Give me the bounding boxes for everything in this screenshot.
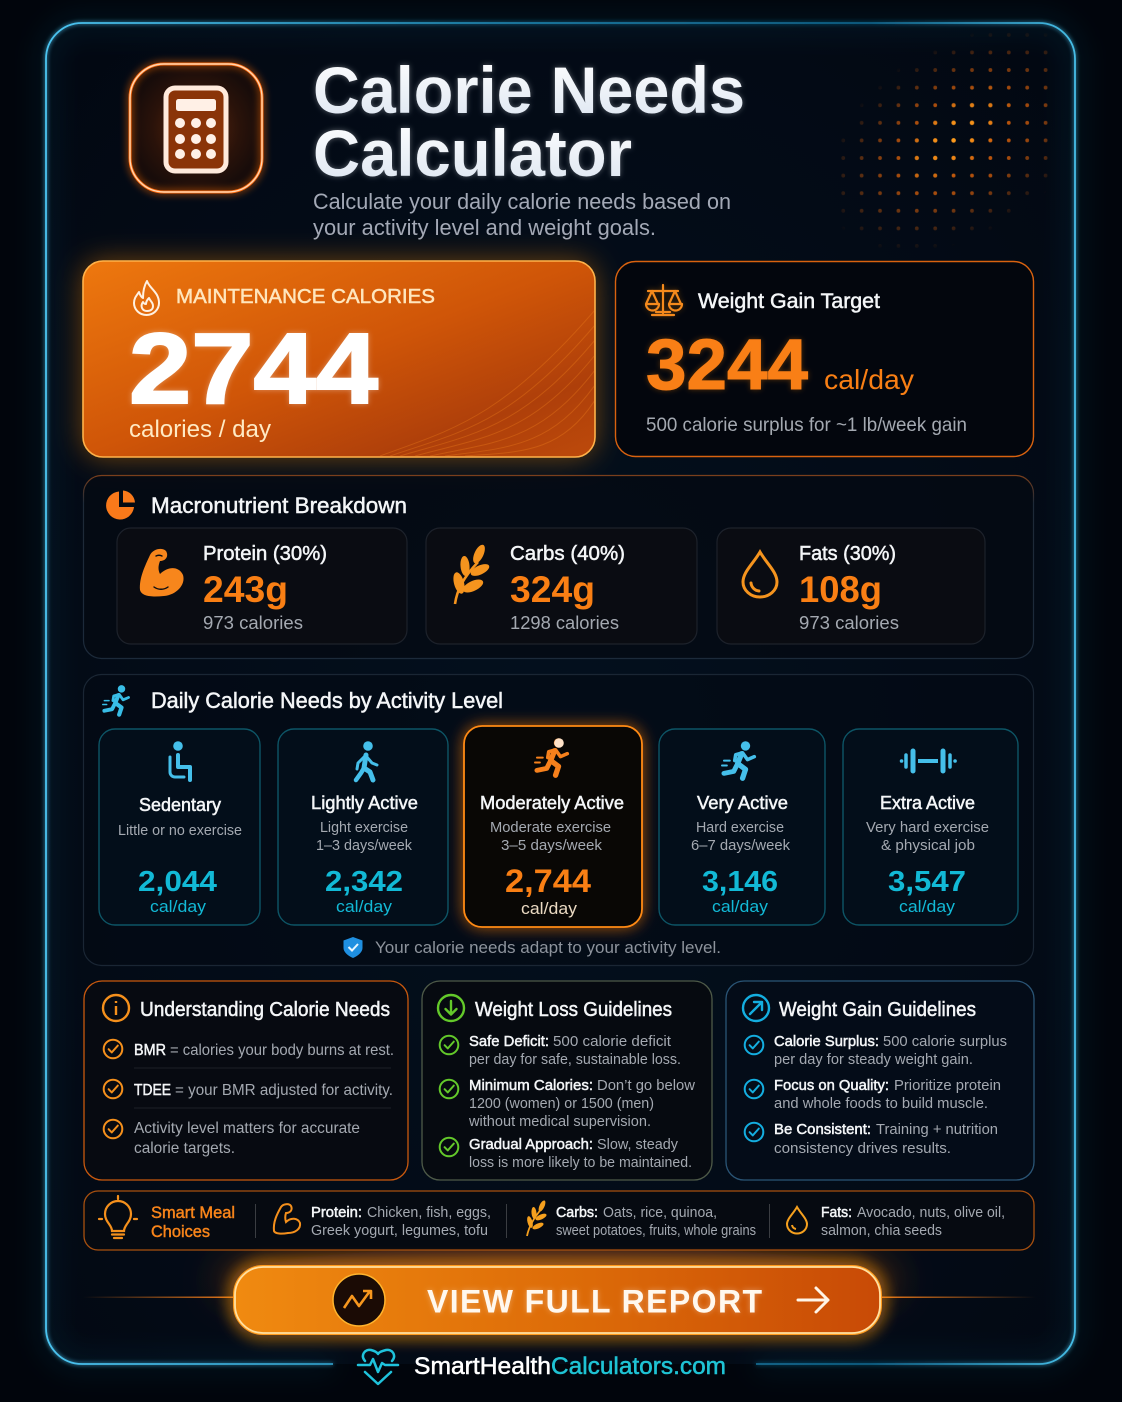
heading: macronutrient breakdown: Macronutrient Breakdown xyxy=(151,493,407,518)
card: fats xyxy=(717,528,985,644)
item: gradual approach: loss is more likely to be maintained. xyxy=(469,1154,692,1171)
icon: walking person xyxy=(356,741,377,780)
panel: macronutrient breakdown xyxy=(84,476,1034,658)
card: lightly active xyxy=(278,729,448,925)
text: protein foods: Protein: xyxy=(311,1205,362,1221)
heading: activity level: Daily Calorie Needs by Activity Level xyxy=(151,688,503,713)
item: minimum calories: without medical supervision. xyxy=(468,1113,651,1130)
icon: shield check xyxy=(344,937,362,958)
text: protein foods: Greek yogurt, legumes, tofu xyxy=(311,1223,488,1239)
description: very active: 6–7 days/week xyxy=(691,838,791,854)
brand name xyxy=(414,1353,726,1380)
subtitle xyxy=(313,189,731,240)
value: lightly active: 2,342 xyxy=(325,866,403,898)
item: safe deficit xyxy=(440,1033,681,1068)
label: smart meal choices xyxy=(151,1204,235,1241)
item: be consistent: Be Consistent: xyxy=(774,1121,871,1138)
item: activity level xyxy=(104,1120,360,1157)
note: activity adaptation: Your calorie needs adapt to your activity level. xyxy=(375,939,721,957)
icon: arrow down xyxy=(438,995,464,1021)
icon: wheat small xyxy=(526,1200,547,1236)
item: TDEE: = your BMR adjusted for activity. xyxy=(175,1082,393,1099)
description: extra active: & physical job xyxy=(881,838,975,854)
label: smart meal choices: Choices xyxy=(151,1223,210,1241)
card: sedentary xyxy=(99,729,260,925)
label: carbs share: Carbs (40%) xyxy=(510,543,625,565)
title: Calculator xyxy=(313,116,632,190)
value: moderately active: 2,744 xyxy=(505,863,591,899)
button glow xyxy=(218,1246,898,1314)
item: minimum calories: Minimum Calories: xyxy=(469,1077,593,1094)
description: extra active: Very hard exercise xyxy=(866,820,989,836)
panel: maintenance calories xyxy=(83,261,595,457)
note: fats calories: 973 calories xyxy=(799,613,899,633)
text: protein foods: Chicken, fish, eggs, xyxy=(367,1205,491,1221)
item: safe deficit: per day for safe, sustainable loss. xyxy=(469,1051,681,1068)
description: very active xyxy=(691,820,791,854)
icon: runner heading xyxy=(103,685,129,715)
item: safe deficit: Safe Deficit: xyxy=(469,1033,549,1050)
text: fats foods: salmon, chia seeds xyxy=(821,1223,942,1239)
item: gradual approach: Slow, steady xyxy=(597,1136,678,1153)
item: focus on quality: and whole foods to build muscle. xyxy=(774,1095,988,1112)
unit: extra active: cal/day xyxy=(899,897,956,916)
text: protein foods xyxy=(311,1205,491,1239)
card: protein xyxy=(117,528,407,644)
text: carbs foods: Oats, rice, quinoa, xyxy=(603,1205,717,1221)
card: extra active xyxy=(843,729,1018,925)
description: lightly active: 1–3 days/week xyxy=(316,838,413,854)
icon: drop small xyxy=(787,1207,807,1234)
item: focus on quality xyxy=(745,1077,1001,1112)
subtitle: Calculate your daily calorie needs based on xyxy=(313,189,731,214)
item: calorie surplus: 500 calorie surplus xyxy=(883,1033,1007,1050)
description: very active: Hard exercise xyxy=(696,820,784,836)
unit: lightly active: cal/day xyxy=(336,897,393,916)
panel: weight gain guidelines xyxy=(726,981,1034,1180)
name: sedentary: Sedentary xyxy=(139,795,221,815)
note: protein calories: 973 calories xyxy=(203,613,303,633)
description: lightly active xyxy=(316,820,413,854)
icon: flame xyxy=(134,281,159,315)
icon: flexed bicep xyxy=(140,549,184,596)
heading: weight gain guidelines: Weight Gain Guidelines xyxy=(779,999,976,1021)
icon: light bulb xyxy=(99,1196,137,1238)
note: carbs calories: 1298 calories xyxy=(510,613,619,633)
text: carbs foods xyxy=(556,1205,756,1239)
icon: trend badge xyxy=(333,1274,385,1326)
text: carbs foods: Carbs: xyxy=(556,1205,598,1221)
icon: seated person xyxy=(170,741,190,780)
description: moderately active xyxy=(490,820,611,854)
value: fats grams: 108g xyxy=(799,569,882,610)
label: maintenance calories: MAINTENANCE CALORIES xyxy=(176,285,435,308)
name: lightly active: Lightly Active xyxy=(311,793,418,813)
unit: calories per day: calories / day xyxy=(129,416,271,443)
item: focus on quality: Prioritize protein xyxy=(894,1077,1001,1094)
footer brand xyxy=(358,1350,726,1384)
text: fats foods xyxy=(821,1205,1005,1239)
unit: moderately active: cal/day xyxy=(521,899,578,918)
card: very active xyxy=(659,729,825,925)
icon: dumbbell xyxy=(902,751,955,771)
card: moderately active xyxy=(464,726,642,927)
card: carbs xyxy=(426,528,697,644)
icon: info xyxy=(103,995,129,1021)
item: be consistent: Training + nutrition xyxy=(876,1121,998,1138)
brand name: Calculators.com xyxy=(551,1353,726,1380)
icon: bicep outline xyxy=(274,1204,300,1234)
item: activity level: Activity level matters for accurate xyxy=(134,1120,360,1137)
icon: pie chart xyxy=(106,490,135,519)
value: very active: 3,146 xyxy=(702,866,778,898)
title xyxy=(313,53,745,190)
text: fats foods: Avocado, nuts, olive oil, xyxy=(857,1205,1005,1221)
item: calorie surplus: per day for steady weight gain. xyxy=(774,1051,973,1068)
icon: sprinting person xyxy=(722,741,754,778)
icon: calculator xyxy=(130,64,262,192)
unit: cal per day: cal/day xyxy=(824,364,914,395)
item: BMR xyxy=(104,1040,394,1059)
icon: arrow up right xyxy=(743,995,769,1021)
panel: understanding calorie needs xyxy=(84,981,408,1180)
item: focus on quality: Focus on Quality: xyxy=(774,1077,889,1094)
icon: wheat xyxy=(451,543,491,604)
value: protein grams: 243g xyxy=(203,569,288,610)
item: be consistent: consistency drives results. xyxy=(774,1140,951,1157)
unit: sedentary: cal/day xyxy=(150,897,207,916)
description: moderately active: 3–5 days/week xyxy=(501,838,603,854)
item: be consistent xyxy=(745,1121,998,1157)
icon: heart pulse xyxy=(358,1350,398,1384)
text: carbs foods: sweet potatoes, fruits, whole grains xyxy=(556,1223,756,1239)
description: lightly active: Light exercise xyxy=(320,820,408,836)
value: sedentary: 2,044 xyxy=(138,866,217,898)
label: view full report: VIEW FULL REPORT xyxy=(427,1284,762,1320)
title: Calorie Needs xyxy=(313,53,745,127)
heading: weight gain target: Weight Gain Target xyxy=(698,290,880,313)
heading: understanding calorie needs: Understanding Calorie Needs xyxy=(140,999,390,1021)
brand name: SmartHealth xyxy=(414,1353,551,1380)
item: activity level: calorie targets. xyxy=(134,1140,235,1157)
icon: running person orange xyxy=(535,738,567,775)
label: fats share: Fats (30%) xyxy=(799,543,896,565)
heading: weight loss guidelines: Weight Loss Guidelines xyxy=(475,999,672,1021)
item: calorie surplus: Calorie Surplus: xyxy=(774,1033,879,1050)
label: protein share: Protein (30%) xyxy=(203,543,327,565)
panel: weight loss guidelines xyxy=(422,981,712,1180)
value: carbs grams: 324g xyxy=(510,569,595,610)
item: BMR: BMR xyxy=(134,1042,166,1059)
subtitle: your activity level and weight goals. xyxy=(313,215,656,240)
item: minimum calories xyxy=(440,1077,695,1130)
icon: arrow right xyxy=(798,1288,828,1312)
name: extra active: Extra Active xyxy=(880,793,975,813)
decorative dot grid xyxy=(841,33,1048,248)
item: minimum calories: 1200 (women) or 1500 (men) xyxy=(469,1095,654,1112)
value: 2744: 2744 xyxy=(129,313,378,425)
text: fats foods: Fats: xyxy=(821,1205,852,1221)
description: sedentary: Little or no exercise xyxy=(118,823,242,839)
item: minimum calories: Don’t go below xyxy=(597,1077,695,1094)
panel: weight gain target xyxy=(616,262,1034,456)
icon: balance scale xyxy=(646,285,682,315)
label: smart meal choices: Smart Meal xyxy=(151,1204,235,1222)
name: very active: Very Active xyxy=(697,793,788,813)
value: 3244: 3244 xyxy=(646,326,809,405)
value: extra active: 3,547 xyxy=(888,866,966,898)
item: gradual approach xyxy=(440,1136,692,1171)
name: moderately active: Moderately Active xyxy=(480,793,624,813)
description: moderately active: Moderate exercise xyxy=(490,820,611,836)
description: extra active xyxy=(866,820,989,854)
item: gradual approach: Gradual Approach: xyxy=(469,1136,593,1153)
panel: activity level xyxy=(84,674,1034,966)
panel: smart meal choices xyxy=(84,1191,1034,1250)
item: BMR: = calories your body burns at rest. xyxy=(170,1042,394,1059)
button: view full report xyxy=(235,1267,880,1333)
item: TDEE xyxy=(104,1080,393,1099)
icon: oil drop xyxy=(743,552,777,597)
item: calorie surplus xyxy=(745,1033,1007,1068)
note: calorie surplus: 500 calorie surplus for ~1 lb/week gain xyxy=(646,414,967,436)
item: safe deficit: 500 calorie deficit xyxy=(553,1033,672,1050)
unit: very active: cal/day xyxy=(712,897,769,916)
item: TDEE: TDEE xyxy=(134,1082,171,1099)
